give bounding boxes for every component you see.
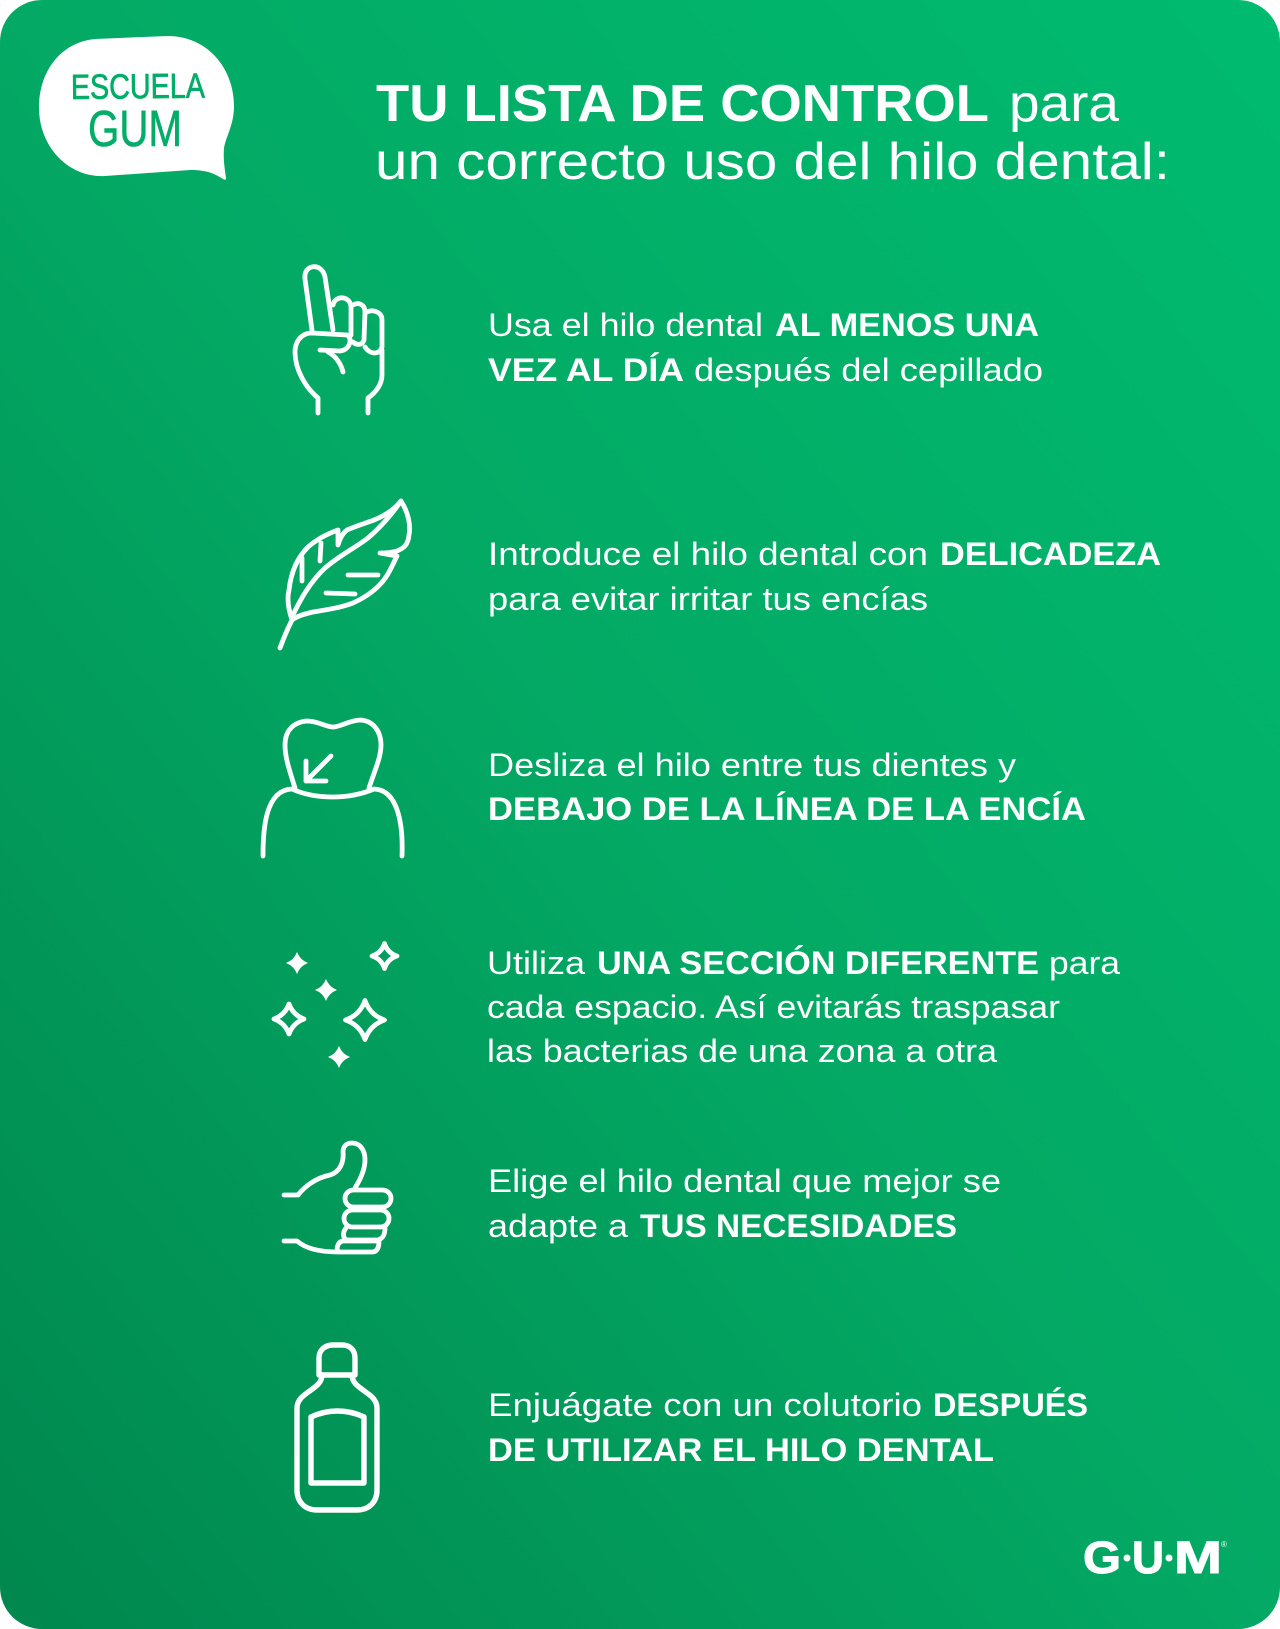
text: item 4: para xyxy=(1049,945,1120,981)
logo: GUM: ® xyxy=(1221,1540,1227,1549)
icon: feather xyxy=(280,501,410,648)
text: item 6: Enjuágate con un colutorio xyxy=(488,1387,922,1423)
logo: Escuela GUM speech bubble: ESCUELA xyxy=(71,67,206,107)
text: item 2: DELICADEZA xyxy=(940,536,1161,572)
logo: GUM xyxy=(1083,1532,1227,1583)
text: item 2: Introduce el hilo dental con xyxy=(488,536,928,572)
logo: Escuela GUM speech bubble: GUM xyxy=(88,100,182,157)
text: item 6 xyxy=(488,1387,1088,1468)
text: item 5: Elige el hilo dental que mejor se xyxy=(488,1163,1001,1199)
text: item 6: DE UTILIZAR EL HILO DENTAL xyxy=(488,1432,994,1468)
text: item 5: TUS NECESIDADES xyxy=(640,1208,957,1244)
title: para xyxy=(1009,75,1119,133)
text: item 5 xyxy=(488,1163,1001,1244)
text: item 4: cada espacio. Así evitarás traspasar xyxy=(487,989,1060,1025)
text: item 3: Desliza el hilo entre tus dientes y xyxy=(488,747,1016,783)
title: un correcto uso del hilo dental: xyxy=(375,133,1170,191)
text: item 5: adapte a xyxy=(488,1208,628,1244)
text: item 4: las bacterias de una zona a otra xyxy=(487,1033,997,1069)
item 1: once a day xyxy=(295,267,1043,413)
text: item 3 xyxy=(488,747,1086,827)
item 5: your needs xyxy=(284,1143,1001,1252)
text: item 1 xyxy=(488,307,1043,388)
text: item 4: Utiliza xyxy=(487,945,585,981)
icon: hand pointing up xyxy=(295,267,382,413)
text: item 1: AL MENOS UNA xyxy=(775,307,1039,343)
text: item 1: Usa el hilo dental xyxy=(488,307,763,343)
title: TU LISTA DE CONTROL xyxy=(376,75,989,133)
title xyxy=(375,75,1170,191)
text: item 2 xyxy=(488,536,1161,617)
logo: GUM: G xyxy=(1083,1532,1121,1583)
icon: mouthwash bottle xyxy=(297,1345,377,1510)
text: item 1: VEZ AL DÍA xyxy=(488,352,684,388)
logo: GUM: U xyxy=(1132,1532,1164,1583)
item 4: different section xyxy=(274,944,1120,1069)
icon: sparkles xyxy=(274,944,397,1068)
text: item 4: UNA SECCIÓN DIFERENTE xyxy=(597,945,1039,981)
item 2: gently xyxy=(280,501,1161,648)
text: item 6: DESPUÉS xyxy=(933,1387,1088,1423)
logo: Escuela GUM speech bubble xyxy=(39,36,234,180)
text: item 2: para evitar irritar tus encías xyxy=(488,581,928,617)
item 6: mouthwash xyxy=(297,1345,1088,1510)
icon: thumbs up xyxy=(284,1143,391,1252)
logo: GUM: M xyxy=(1174,1532,1222,1583)
text: item 3: DEBAJO DE LA LÍNEA DE LA ENCÍA xyxy=(488,791,1086,827)
icon: tooth and gum with arrow xyxy=(263,720,402,856)
text: item 1: después del cepillado xyxy=(694,352,1043,388)
item 3: below gum line xyxy=(263,720,1086,856)
text: item 4 xyxy=(487,945,1120,1069)
